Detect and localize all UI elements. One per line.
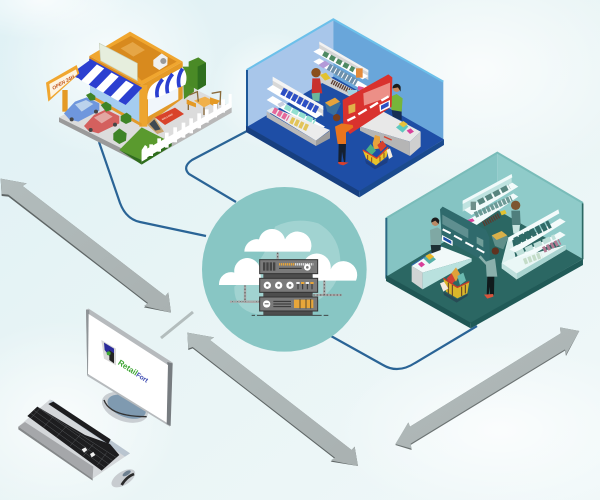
- back shelf: [313, 42, 368, 98]
- man at counter: [430, 218, 444, 253]
- walls: [247, 19, 443, 140]
- counter: [412, 246, 472, 289]
- connector lines: [99, 131, 477, 369]
- illustration: blue shop interior: [246, 19, 444, 197]
- hand basket: [492, 231, 508, 249]
- welcome mat: WELCOME: [162, 114, 174, 121]
- sign: [46, 65, 79, 112]
- walls: [386, 153, 583, 279]
- welcome mat: [155, 108, 184, 125]
- computer: [18, 309, 173, 491]
- server rack: [252, 260, 328, 315]
- clouds: [219, 229, 357, 285]
- woman: [511, 201, 521, 235]
- sign: OPEN 24H: [51, 74, 76, 92]
- lawn: [119, 127, 172, 165]
- logo: RetailFort: [116, 358, 151, 385]
- billboard: [99, 43, 137, 81]
- cloud server circle: [202, 187, 367, 352]
- mouse: [108, 466, 138, 491]
- trees: [183, 57, 206, 99]
- network lines: [230, 253, 342, 302]
- small grey connector bar: [161, 312, 193, 338]
- picket fence: [142, 94, 232, 162]
- cafe table: [187, 92, 221, 115]
- back shelf: [463, 174, 518, 225]
- illustration: teal shop interior: [386, 153, 583, 328]
- credit card: [343, 74, 392, 134]
- red car: [84, 109, 119, 133]
- hand basket: [325, 98, 341, 116]
- circle backdrop: [202, 187, 367, 352]
- arrow: shop link: [395, 327, 579, 450]
- keyboard: [18, 399, 130, 481]
- hedges: [86, 93, 131, 144]
- floor: [246, 77, 444, 197]
- building: [89, 32, 183, 127]
- man in green: [389, 84, 403, 121]
- awning side: [147, 67, 187, 99]
- monitor: [86, 309, 173, 427]
- floor: [386, 210, 583, 328]
- chalkboard: [147, 117, 164, 134]
- man in orange: [333, 114, 353, 165]
- woman: [311, 68, 322, 102]
- shopping cart: [363, 135, 393, 169]
- man with card: [479, 247, 499, 299]
- counter: [360, 112, 421, 156]
- arrow: store link: [1, 179, 171, 313]
- shopping cart: [440, 267, 469, 303]
- air conditioner: [153, 53, 168, 70]
- monitor stand: [98, 386, 152, 429]
- blue car: [64, 97, 99, 122]
- awning front: [74, 59, 142, 105]
- inner highlight: [234, 221, 340, 315]
- credit card: [440, 207, 490, 263]
- front shelf: [502, 209, 566, 279]
- arrow: cloud link: [187, 333, 358, 466]
- front shelf: [267, 77, 330, 146]
- illustration: street store: [46, 32, 232, 165]
